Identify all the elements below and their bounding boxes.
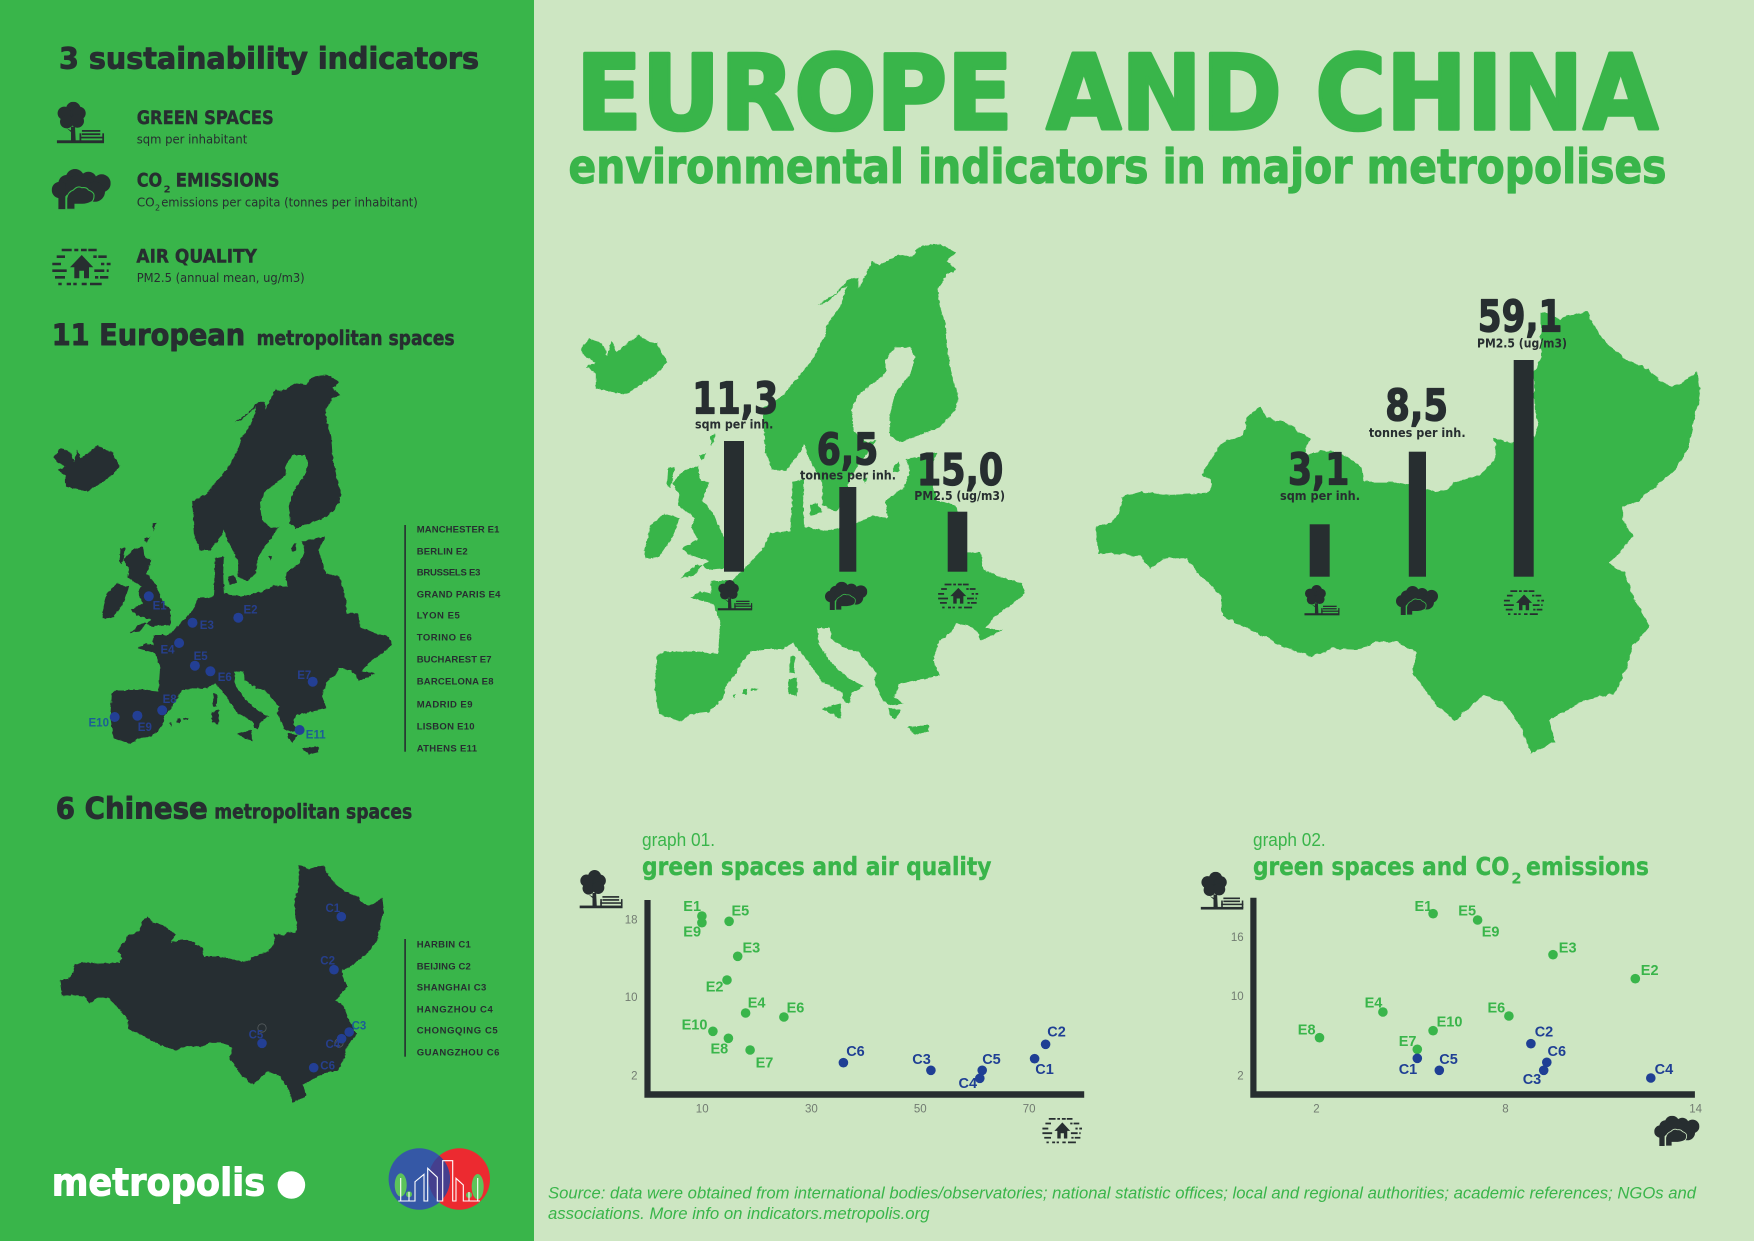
axis ticks: 18 bbox=[625, 914, 638, 926]
graph label: graph 01. bbox=[642, 830, 715, 850]
bar: China green spaces 3,1: 3,1 bbox=[1288, 444, 1349, 495]
axis ticks: 70 bbox=[1023, 1104, 1035, 1116]
panel: China indicators map bbox=[1096, 292, 1700, 753]
bar: Europe green spaces 11,3: sqm per inh. bbox=[695, 416, 773, 431]
legend: European cities: BARCELONA E8 bbox=[417, 676, 494, 687]
map: Europe with cities: E7 bbox=[297, 670, 311, 682]
scatter: Chinese cities: C4 bbox=[958, 1076, 977, 1092]
graph title: CO bbox=[1476, 852, 1510, 881]
panel: 6 Chinese metropolitan spaces bbox=[56, 791, 499, 1102]
legend: Chinese cities bbox=[404, 939, 499, 1058]
legend: Chinese cities: HANGZHOU C4 bbox=[417, 1004, 494, 1015]
scatter: European cities bbox=[682, 899, 804, 1072]
legend: Chinese cities: BEIJING C2 bbox=[417, 961, 471, 972]
scatter: European cities: E9 bbox=[683, 925, 701, 941]
axis ticks: 10 bbox=[1231, 991, 1244, 1003]
description: CO2 emissions: CO bbox=[137, 195, 155, 210]
map: Europe with cities: E6 bbox=[218, 672, 232, 684]
legend: Chinese cities: HARBIN C1 bbox=[417, 939, 472, 950]
scatter: European cities: E3 bbox=[1559, 941, 1577, 957]
axis ticks: 2 bbox=[631, 1070, 638, 1082]
legend: European cities: MADRID E9 bbox=[417, 699, 472, 710]
scatter: European cities: E6 bbox=[1488, 1001, 1505, 1017]
source note: associations. More info on indicators.metropolis.org bbox=[548, 1204, 930, 1223]
bar: China air quality 59,1: PM2.5 (ug/m3) bbox=[1477, 336, 1567, 351]
axes bbox=[1250, 898, 1695, 1098]
map: China with cities bbox=[60, 865, 384, 1102]
map: Europe with cities: E10 bbox=[88, 717, 109, 729]
scatter: European cities: E1 bbox=[1414, 899, 1432, 915]
heading: 11 European: 11 European bbox=[52, 318, 245, 352]
axis ticks bbox=[1231, 932, 1703, 1116]
graph title: green spaces and air quality bbox=[642, 852, 992, 881]
label: CO2 emissions: CO bbox=[137, 170, 162, 192]
scatter: Chinese cities: C5 bbox=[982, 1052, 1001, 1068]
scatter: Chinese cities: C2 bbox=[1047, 1025, 1066, 1041]
map: China with cities: C5 bbox=[249, 1029, 264, 1041]
map: China with cities: C6 bbox=[320, 1060, 335, 1072]
graph title bbox=[1253, 852, 1649, 887]
legend: Chinese cities: CHONGQING C5 bbox=[417, 1025, 498, 1036]
scatter: Chinese cities bbox=[839, 1025, 1066, 1092]
map: China with cities: C4 bbox=[326, 1039, 341, 1051]
scatter: European cities: E1 bbox=[683, 899, 701, 915]
left panel background bbox=[0, 0, 534, 1241]
label: CO2 emissions: EMISSIONS bbox=[176, 170, 280, 192]
subheading: metropolitan spaces: metropolitan spaces bbox=[214, 799, 412, 823]
source note bbox=[548, 1183, 1697, 1223]
graph title: green spaces and bbox=[1253, 852, 1468, 881]
legend: European cities: BERLIN E2 bbox=[417, 546, 468, 557]
bar: China air quality 59,1: 59,1 bbox=[1478, 292, 1562, 343]
bar: Europe air quality 15,0: 15,0 bbox=[917, 445, 1003, 496]
scatter: European cities: E2 bbox=[1641, 963, 1659, 979]
scatter: Chinese cities: C1 bbox=[1399, 1062, 1417, 1078]
scatter: European cities: E8 bbox=[1298, 1023, 1316, 1039]
scatter: European cities: E10 bbox=[682, 1018, 707, 1034]
bar: Europe CO2 emissions 6,5: 6,5 bbox=[817, 424, 878, 475]
scatter: European cities: E2 bbox=[706, 980, 723, 996]
bar: China CO2 emissions 8,5 bbox=[1369, 381, 1466, 615]
bar: China green spaces 3,1 bbox=[1280, 444, 1360, 615]
bar: Europe CO2 emissions 6,5 bbox=[800, 424, 896, 610]
axes bbox=[644, 900, 1084, 1098]
scatter: European cities: E4 bbox=[1365, 996, 1382, 1012]
scatter: Chinese cities bbox=[1399, 1025, 1673, 1088]
legend: European cities: LYON E5 bbox=[417, 610, 461, 621]
scatter: Chinese cities: C6 bbox=[846, 1044, 865, 1060]
map: Europe bbox=[580, 244, 1025, 735]
panel: 3 sustainability indicators bbox=[52, 41, 479, 285]
description: CO2 emissions: emissions per capita (tonnes per inhabitant) bbox=[161, 195, 418, 210]
scatter: European cities: E5 bbox=[1458, 904, 1476, 920]
legend: European cities: LISBON E10 bbox=[417, 721, 475, 732]
scatter: European cities: E7 bbox=[756, 1056, 773, 1072]
source note: Source: data were obtained from international bodies/observatories; national statistic offices; local and regional authorities; academic references; NGOs and bbox=[548, 1183, 1697, 1202]
legend: Chinese cities: GUANGZHOU C6 bbox=[417, 1047, 499, 1058]
label: air quality: AIR QUALITY bbox=[136, 245, 257, 267]
icon: CO2 emissions bbox=[52, 169, 111, 209]
axis ticks: 14 bbox=[1689, 1104, 1703, 1116]
icon: y axis green spaces bbox=[1201, 872, 1243, 910]
bar: Europe air quality 15,0 bbox=[914, 445, 1005, 607]
map: Europe with cities: E9 bbox=[138, 722, 152, 734]
graph label: graph 02. bbox=[1253, 830, 1326, 850]
legend: European cities: ATHENS E11 bbox=[417, 743, 478, 754]
legend: Chinese cities: SHANGHAI C3 bbox=[417, 982, 486, 993]
icon: x axis CO2 emissions bbox=[1654, 1116, 1699, 1146]
scatter: Chinese cities: C5 bbox=[1439, 1052, 1458, 1068]
map: Europe with cities: E2 bbox=[244, 604, 258, 616]
bar: China CO2 emissions 8,5: tonnes per inh. bbox=[1369, 425, 1466, 440]
bar: Europe air quality 15,0: PM2.5 (ug/m3) bbox=[914, 488, 1005, 503]
icon: air quality bbox=[52, 250, 111, 284]
logo: metropolis: metropolis bbox=[52, 1161, 265, 1205]
bar: Europe green spaces 11,3 bbox=[692, 373, 778, 610]
bar: China CO2 emissions 8,5: 8,5 bbox=[1385, 381, 1448, 432]
title: EUROPE AND CHINA bbox=[576, 34, 1658, 154]
scatter: European cities bbox=[1298, 899, 1659, 1054]
description: CO2 emissions: 2 bbox=[155, 204, 160, 213]
graph title: emissions bbox=[1526, 852, 1649, 881]
panel: 11 European metropolitan spaces bbox=[52, 318, 501, 754]
map: China with cities: C1 bbox=[326, 903, 341, 915]
axis ticks: 2 bbox=[1313, 1104, 1320, 1116]
legend: European cities bbox=[404, 524, 501, 754]
icon: green spaces bbox=[57, 102, 104, 143]
scatter: European cities: E10 bbox=[1437, 1015, 1462, 1031]
bar: China green spaces 3,1: sqm per inh. bbox=[1280, 488, 1360, 503]
scatter: European cities: E5 bbox=[732, 904, 749, 920]
heading: 6 Chinese: 6 Chinese bbox=[56, 791, 208, 825]
axis ticks bbox=[625, 914, 1035, 1116]
panel: graph 02 bbox=[1201, 830, 1703, 1146]
map: Europe with cities: E4 bbox=[160, 644, 175, 656]
map: Europe with cities: E11 bbox=[306, 729, 326, 741]
scatter: European cities: E9 bbox=[1482, 925, 1499, 941]
map: Europe with cities: E3 bbox=[200, 620, 214, 632]
graph title: 2 bbox=[1511, 869, 1522, 887]
scatter: European cities: E8 bbox=[710, 1042, 728, 1058]
map: Europe with cities bbox=[53, 375, 392, 754]
panel: Europe indicators map bbox=[580, 244, 1025, 735]
axis ticks: 8 bbox=[1502, 1104, 1509, 1116]
subheading: metropolitan spaces: metropolitan spaces bbox=[257, 326, 455, 350]
scatter: European cities: E6 bbox=[787, 1001, 804, 1017]
axis ticks: 16 bbox=[1231, 932, 1244, 944]
logo: Europe and China circles bbox=[389, 1148, 490, 1210]
bar: Europe CO2 emissions 6,5: tonnes per inh. bbox=[800, 467, 896, 482]
label: CO2 emissions bbox=[137, 170, 280, 196]
map: China with cities: C3 bbox=[352, 1020, 366, 1032]
bar: Europe green spaces 11,3: 11,3 bbox=[692, 373, 778, 424]
axis ticks: 50 bbox=[914, 1104, 927, 1116]
axis ticks: 2 bbox=[1237, 1070, 1244, 1082]
scatter: European cities: E3 bbox=[742, 941, 760, 957]
legend: European cities: TORINO E6 bbox=[417, 632, 472, 643]
axis ticks: 10 bbox=[696, 1104, 709, 1116]
map: China with cities: C2 bbox=[320, 955, 335, 967]
scatter: Chinese cities: C1 bbox=[1035, 1062, 1054, 1078]
panel: graph 01 bbox=[580, 830, 1084, 1142]
scatter: Chinese cities: C6 bbox=[1548, 1044, 1566, 1060]
map: Europe with cities: E8 bbox=[163, 694, 177, 706]
heading: 3 sustainability indicators: 3 sustainability indicators bbox=[59, 41, 479, 75]
scatter: Chinese cities: C3 bbox=[1523, 1072, 1541, 1088]
axis ticks: 10 bbox=[625, 992, 638, 1004]
axis ticks: 30 bbox=[805, 1104, 818, 1116]
label: green spaces: GREEN SPACES bbox=[137, 107, 274, 129]
legend: European cities: BUCHAREST E7 bbox=[417, 654, 492, 665]
map: China bbox=[1096, 311, 1700, 753]
legend: European cities: GRAND PARIS E4 bbox=[417, 589, 501, 600]
map: Europe with cities: E1 bbox=[153, 600, 167, 612]
map: Europe with cities: E5 bbox=[194, 651, 208, 663]
scatter: Chinese cities: C4 bbox=[1655, 1062, 1673, 1078]
bar: China air quality 59,1 bbox=[1477, 292, 1567, 614]
legend: European cities: BRUSSELS E3 bbox=[417, 567, 480, 578]
description: air quality: PM2.5 (annual mean, ug/m3) bbox=[137, 270, 305, 285]
icon: x axis air quality bbox=[1042, 1119, 1082, 1142]
scatter: Chinese cities: C3 bbox=[912, 1052, 931, 1068]
description: green spaces: sqm per inhabitant bbox=[137, 132, 247, 147]
icon: y axis green spaces bbox=[580, 870, 623, 908]
legend: European cities: MANCHESTER E1 bbox=[417, 524, 500, 535]
scatter: Chinese cities: C2 bbox=[1535, 1025, 1553, 1041]
scatter: European cities: E4 bbox=[748, 996, 765, 1012]
label: CO2 emissions: 2 bbox=[164, 185, 171, 196]
scatter: European cities: E7 bbox=[1399, 1034, 1416, 1050]
